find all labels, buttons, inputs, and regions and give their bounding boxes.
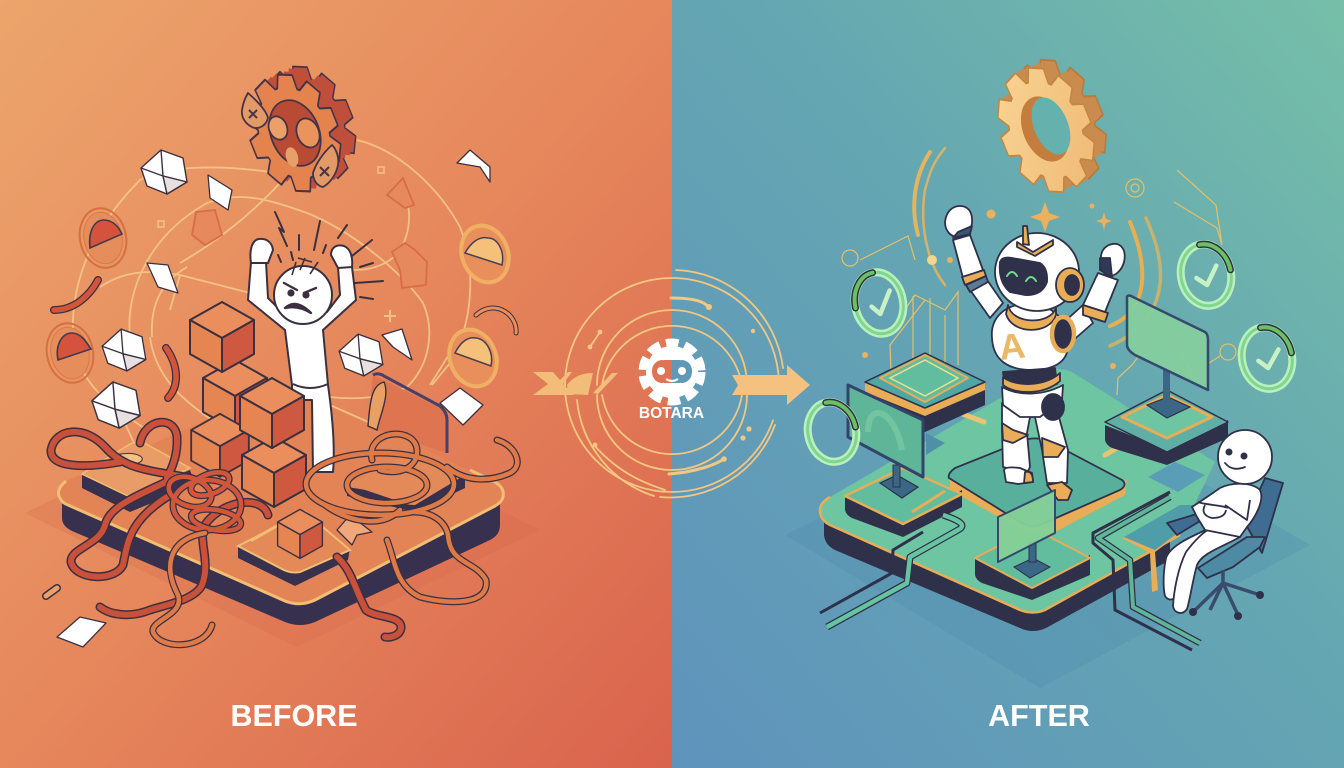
after label: AFTER xyxy=(988,699,1090,733)
before label: BEFORE xyxy=(230,699,358,733)
dial lower right xyxy=(441,323,505,393)
left small platform xyxy=(82,442,195,512)
after ground shadow xyxy=(785,400,1310,688)
main platform base xyxy=(62,495,500,625)
check ring 1 xyxy=(849,268,909,338)
desk xyxy=(1122,505,1215,592)
before ground shadow xyxy=(25,395,540,647)
robot raised arm right xyxy=(1063,244,1125,343)
robot: A xyxy=(997,324,1027,368)
dial mid left xyxy=(41,319,99,387)
floating golden gear xyxy=(981,46,1123,206)
front monitor xyxy=(998,490,1055,562)
panel: before illustration xyxy=(25,53,540,733)
floor cables xyxy=(820,492,1200,650)
platform gold edge xyxy=(58,470,503,604)
robot raised arm left xyxy=(945,206,1003,318)
clipboard dials xyxy=(41,204,517,393)
check ring 2 xyxy=(1175,239,1237,311)
robot torso xyxy=(992,304,1068,370)
main green platform top xyxy=(820,369,1215,612)
left monitor platform xyxy=(845,465,962,537)
check rings xyxy=(802,239,1298,466)
small front monitor platform xyxy=(975,528,1090,600)
panel: after background xyxy=(672,0,1344,768)
botara wordmark: BOTARA xyxy=(639,405,704,422)
transition rings xyxy=(565,270,783,497)
connectors and tiles xyxy=(926,413,1205,492)
panel: botara transition xyxy=(533,270,810,497)
dial top left xyxy=(74,204,132,272)
right monitor xyxy=(1127,296,1208,390)
tablet xyxy=(368,374,447,453)
right small platform xyxy=(347,455,465,512)
robot xyxy=(945,206,1125,500)
flying papers xyxy=(57,150,490,647)
loose arcs xyxy=(54,280,516,398)
robot legs xyxy=(1002,403,1030,473)
tangled cables xyxy=(46,422,517,645)
botara logo gear xyxy=(644,340,700,400)
front boxes xyxy=(240,378,306,507)
small box xyxy=(278,509,322,558)
floating gear xyxy=(231,53,372,205)
right monitor platform xyxy=(1105,370,1228,465)
robot head xyxy=(995,233,1079,311)
transition dots xyxy=(588,304,755,462)
sparkles xyxy=(862,202,1116,369)
broken arrow xyxy=(533,372,618,395)
panel: before background xyxy=(0,0,672,768)
dial top right xyxy=(453,219,517,289)
energy arcs xyxy=(914,148,1160,346)
main green platform base xyxy=(824,515,1170,631)
progress arrow xyxy=(732,365,810,405)
main platform top xyxy=(58,390,504,604)
holo platform xyxy=(865,353,985,432)
green platform gold edge xyxy=(820,497,1180,612)
chaos orbit lines xyxy=(73,140,470,445)
broken shapes xyxy=(192,178,427,288)
back boxes xyxy=(190,302,267,477)
center small platform xyxy=(238,512,350,586)
check ring 4 xyxy=(802,398,862,466)
seated person xyxy=(1164,430,1272,613)
left monitor xyxy=(848,385,923,477)
panel: after illustration xyxy=(785,46,1310,733)
office chair xyxy=(1167,478,1283,620)
center pad xyxy=(949,438,1127,540)
circuit lines xyxy=(842,170,1236,395)
frustrated person xyxy=(248,212,383,472)
check ring 3 xyxy=(1236,322,1298,394)
